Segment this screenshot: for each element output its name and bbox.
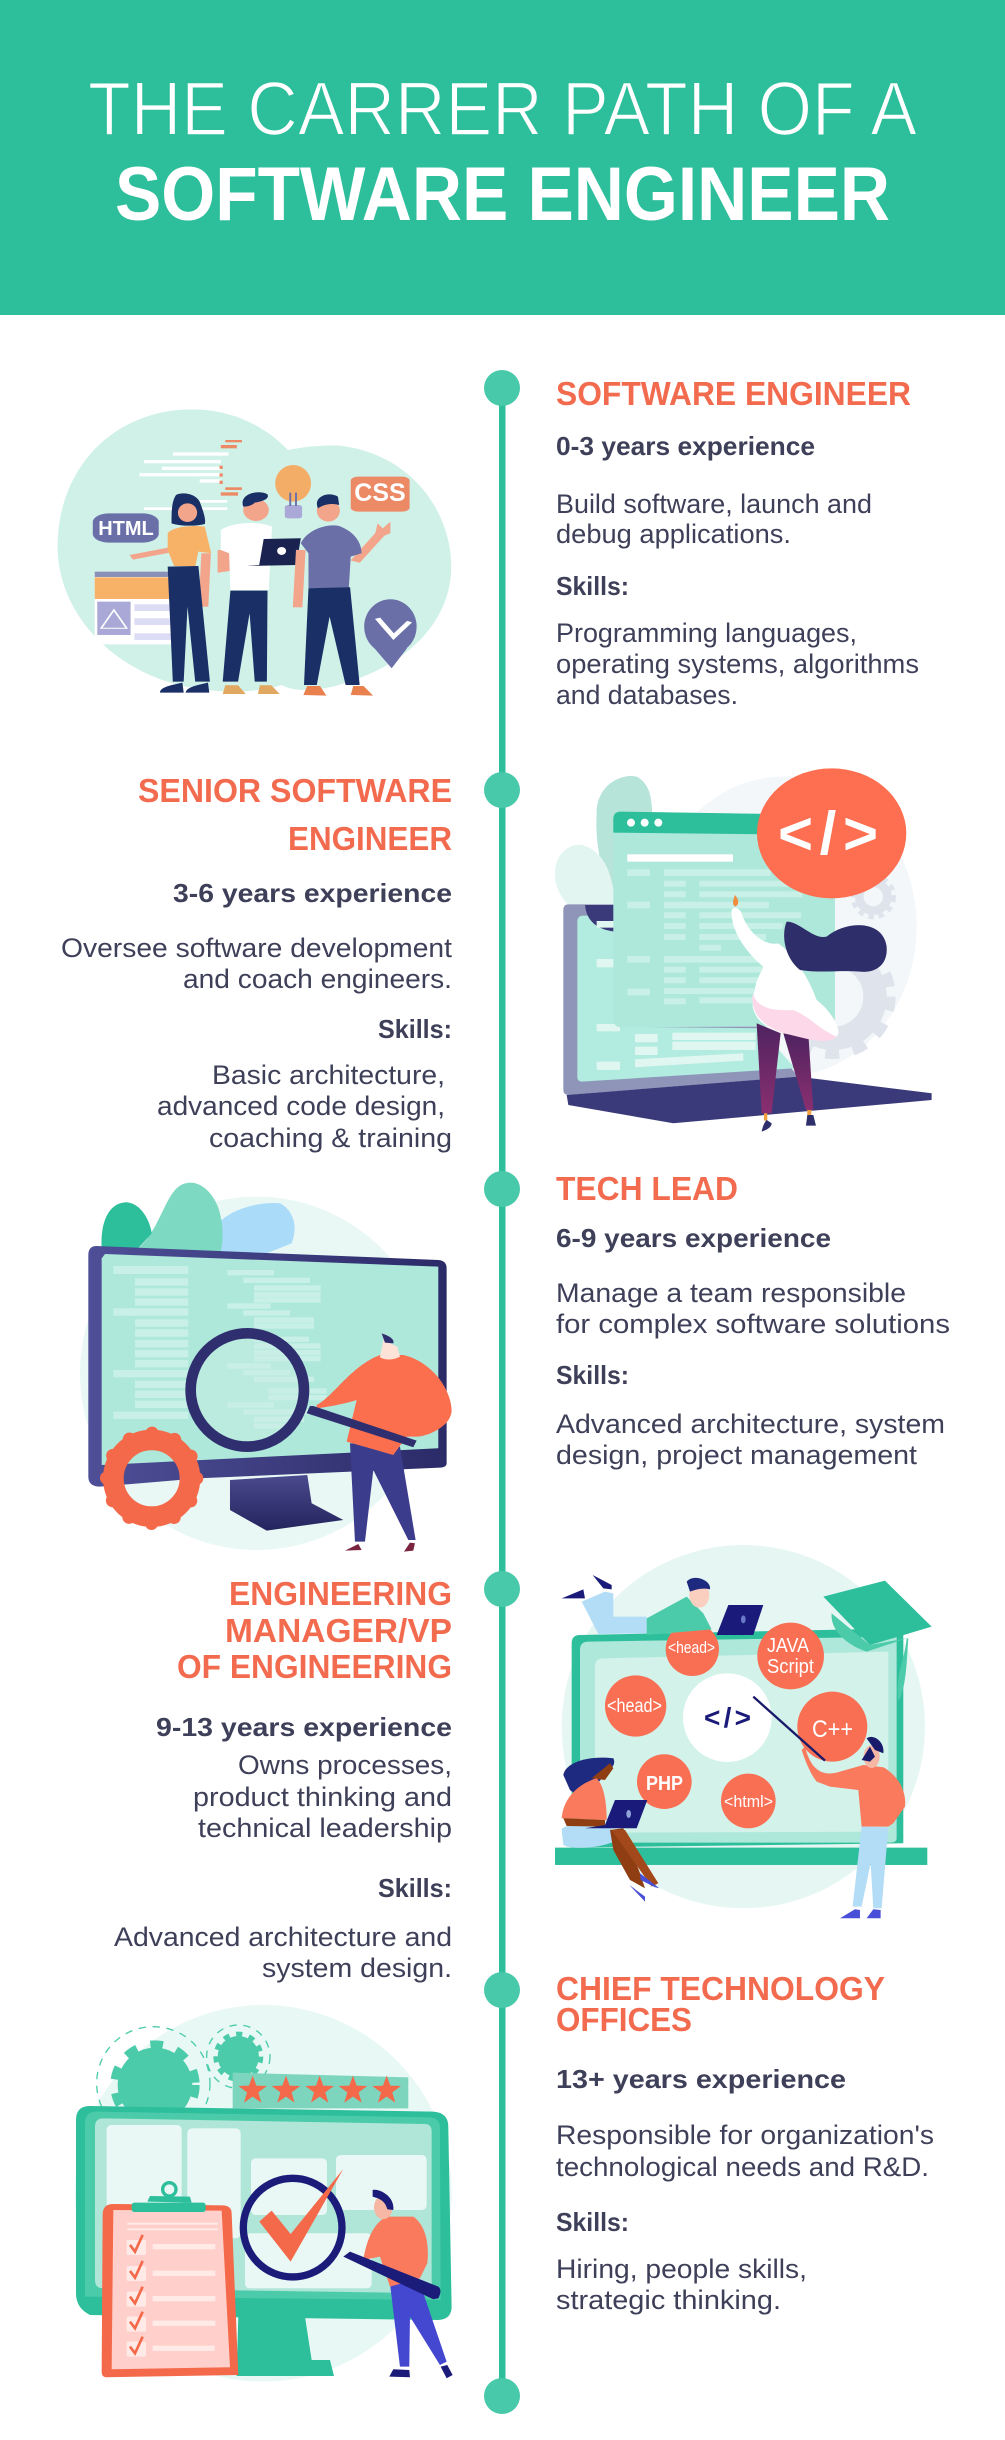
text block: senior software engineer: advanced code design, <box>157 1091 445 1121</box>
illustration: code window on laptop <box>555 768 932 1132</box>
text block: senior software engineer: Basic architecture, <box>212 1060 445 1090</box>
text block: senior software engineer: SENIOR SOFTWARE <box>138 772 452 809</box>
text block: senior software engineer: Oversee software development <box>61 933 453 963</box>
text block: software engineer <box>556 375 919 710</box>
text block: senior software engineer: coaching & training <box>209 1123 452 1153</box>
text block: chief technology officer: technological needs and R&D. <box>556 2152 929 2182</box>
text block: senior software engineer: 3-6 years experience <box>173 878 452 908</box>
text block: engineering manager: OF ENGINEERING <box>177 1648 452 1685</box>
text block: chief technology officer <box>556 1970 934 2315</box>
text block: software engineer: SOFTWARE ENGINEER <box>556 375 911 412</box>
text block: chief technology officer: Responsible for organization's <box>556 2120 934 2150</box>
text block: software engineer: Build software, launch and <box>556 489 872 519</box>
text block: chief technology officer: CHIEF TECHNOLOGY <box>556 1970 885 2007</box>
text block: software engineer: and databases. <box>556 680 738 710</box>
illustration: checklist and review <box>75 2005 453 2382</box>
language labels: <head> <box>668 1638 715 1657</box>
language labels: <head> <box>607 1696 662 1717</box>
text block: engineering manager: Skills: <box>378 1873 452 1903</box>
text block: engineering manager: MANAGER/VP <box>225 1612 452 1649</box>
text block: engineering manager <box>114 1575 452 1983</box>
text block: chief technology officer: OFFICES <box>556 2001 692 2038</box>
text block: software engineer: debug applications. <box>556 519 791 549</box>
text block: senior software engineer <box>61 772 453 1153</box>
text block: software engineer: operating systems, algorithms <box>556 649 919 679</box>
text block: engineering manager: technical leadership <box>198 1813 452 1843</box>
text block: senior software engineer: and coach engineers. <box>183 964 452 994</box>
illustration: laptop with programming languages <box>555 1545 932 1918</box>
text block: engineering manager: system design. <box>262 1953 452 1983</box>
timeline <box>484 370 520 2414</box>
text block: engineering manager: Advanced architecture and <box>114 1922 452 1952</box>
text block: tech lead: TECH LEAD <box>556 1170 738 1207</box>
text block: engineering manager: Owns processes, <box>238 1750 452 1780</box>
language labels: PHP <box>646 1773 683 1795</box>
language labels: C++ <box>812 1716 853 1743</box>
language labels: </> <box>704 1702 751 1733</box>
illustration: team with HTML and CSS <box>58 409 451 696</box>
text block: senior software engineer: Skills: <box>378 1014 452 1044</box>
header banner <box>0 0 1005 315</box>
text block: tech lead: design, project management <box>556 1440 918 1470</box>
text block: engineering manager: 9-13 years experience <box>156 1712 452 1742</box>
HTML label: HTML <box>98 518 154 540</box>
title line 1: THE CARRER PATH OF A <box>88 67 917 152</box>
language labels: JAVA <box>767 1635 810 1657</box>
code symbol: </> <box>778 800 878 867</box>
text block: tech lead: Manage a team responsible <box>556 1278 906 1308</box>
text block: chief technology officer: Hiring, people skills, <box>556 2254 807 2284</box>
text block: chief technology officer: 13+ years experience <box>556 2064 846 2094</box>
text block: chief technology officer: strategic thinking. <box>556 2285 781 2315</box>
text block: senior software engineer: ENGINEER <box>288 820 452 857</box>
language labels: <html> <box>724 1792 773 1811</box>
text block: software engineer: Programming languages, <box>556 618 857 648</box>
text block: tech lead <box>556 1170 950 1470</box>
text block: tech lead: 6-9 years experience <box>556 1223 831 1253</box>
illustration: monitor with magnifier <box>80 1183 452 1552</box>
CSS label: CSS <box>354 479 406 507</box>
text block: tech lead: for complex software solutions <box>556 1309 950 1339</box>
text block: software engineer: 0-3 years experience <box>556 431 815 461</box>
text block: tech lead: Advanced architecture, system <box>556 1409 945 1439</box>
title line 2: SOFTWARE ENGINEER <box>115 152 890 237</box>
text block: software engineer: Skills: <box>556 571 629 601</box>
text block: chief technology officer: Skills: <box>556 2207 629 2237</box>
language labels <box>607 1635 853 1811</box>
language labels: Script <box>767 1656 814 1678</box>
text block: engineering manager: product thinking and <box>193 1782 452 1812</box>
text block: engineering manager: ENGINEERING <box>229 1575 452 1612</box>
text block: tech lead: Skills: <box>556 1360 629 1390</box>
